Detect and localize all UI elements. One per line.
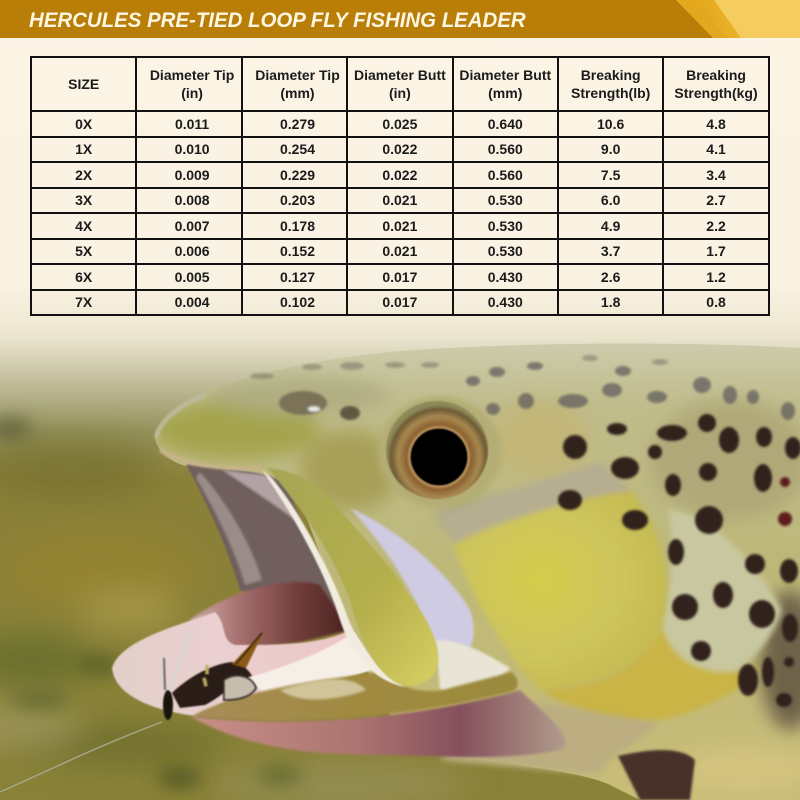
size table: 0.021 [382, 192, 417, 208]
mouth interior [186, 464, 348, 632]
size table: 0.430 [488, 269, 523, 285]
size table: 3.7 [601, 243, 620, 259]
title: HERCULES PRE-TIED LOOP FLY FISHING LEADER [29, 8, 526, 32]
banner [0, 0, 800, 38]
size table: 0.560 [488, 141, 523, 157]
size table: 0.017 [382, 269, 417, 285]
size table: 0.430 [488, 294, 523, 310]
size table: 2X [75, 167, 92, 183]
size table: 0.530 [488, 192, 523, 208]
size table: 0.021 [382, 218, 417, 234]
size table: 0.127 [280, 269, 315, 285]
eye [378, 396, 502, 508]
fish body with tonal patches [140, 335, 800, 800]
size table: 10.6 [597, 116, 624, 132]
size table: 4.8 [706, 116, 726, 132]
size table: Diameter Butt [354, 67, 446, 83]
size table: (in) [389, 85, 411, 101]
belly [440, 700, 660, 775]
size table: 5X [75, 243, 92, 259]
size table: 0.229 [280, 167, 315, 183]
size table: 0.004 [175, 294, 210, 310]
lower lip pink [190, 690, 565, 757]
size table: 3.4 [706, 167, 726, 183]
fly on jaw [163, 629, 265, 720]
size table: Strength(kg) [674, 85, 758, 101]
size table: 1.2 [706, 269, 726, 285]
tippet line [0, 722, 162, 792]
spots [558, 414, 800, 707]
size table: Breaking [581, 67, 641, 83]
size table: 0.011 [175, 116, 209, 132]
size table: 4.9 [601, 218, 620, 234]
lower yellow plate [540, 625, 760, 722]
size table: SIZE [68, 76, 99, 92]
maxilla white edge [262, 470, 405, 687]
lower jaw [112, 612, 370, 716]
size table: 0.530 [488, 243, 523, 259]
size table: 0.005 [175, 269, 210, 285]
size table: (mm) [488, 85, 522, 101]
size table: 0.022 [382, 141, 417, 157]
pectoral fin [618, 750, 695, 800]
throat membrane [350, 508, 474, 661]
size table: 1.7 [706, 243, 726, 259]
trout [112, 335, 800, 800]
size table: 0.022 [382, 167, 417, 183]
size table: Breaking [686, 67, 746, 83]
size table: 0.8 [706, 294, 726, 310]
size table: 0.530 [488, 218, 523, 234]
size table: (mm) [280, 85, 315, 101]
size table: 0.279 [280, 116, 315, 132]
olive jaw band [192, 672, 518, 721]
size table: (in) [181, 85, 203, 101]
throat red [190, 582, 350, 650]
size table: 0.640 [488, 116, 523, 132]
size table: 6.0 [601, 192, 620, 208]
size table: 0.007 [175, 218, 210, 234]
size table: 4.1 [706, 141, 726, 157]
size table: 0.008 [175, 192, 210, 208]
size table: 4X [75, 218, 92, 234]
size table: Diameter Tip [150, 67, 234, 83]
size table: 0.025 [382, 116, 417, 132]
size table: 0.254 [280, 141, 315, 157]
size table: 7.5 [601, 167, 620, 183]
size table [30, 56, 770, 316]
size table: 0.010 [175, 141, 210, 157]
size table: 9.0 [601, 141, 620, 157]
gill cover [450, 490, 667, 690]
red spots [778, 477, 792, 526]
size table: 0.102 [280, 294, 315, 310]
size table: 0.017 [382, 294, 417, 310]
faded upper spots [466, 362, 795, 420]
size table: 0.178 [280, 218, 315, 234]
size table: 2.6 [601, 269, 620, 285]
size table: 0X [75, 116, 92, 132]
size table: 0.006 [175, 243, 210, 259]
size table: 6X [75, 269, 92, 285]
size table: 0.021 [382, 243, 417, 259]
size table: 0.203 [280, 192, 315, 208]
size table: 1X [75, 141, 92, 157]
maxilla [267, 468, 438, 686]
size table: 2.7 [706, 192, 726, 208]
size table: 1.8 [601, 294, 620, 310]
size table: 0.152 [280, 243, 315, 259]
snout edge [156, 395, 205, 438]
size table: 2.2 [706, 218, 726, 234]
gill plate pale rear [630, 510, 782, 690]
size table: 0.009 [175, 167, 210, 183]
size table: 3X [75, 192, 92, 208]
nostril [279, 391, 360, 420]
size table: Strength(lb) [571, 85, 650, 101]
white inner lip [248, 632, 378, 692]
size table: 7X [75, 294, 92, 310]
size table: Diameter Butt [459, 67, 551, 83]
size table: Diameter Tip [255, 67, 340, 83]
size table: 0.560 [488, 167, 523, 183]
silver cheek [442, 462, 632, 545]
